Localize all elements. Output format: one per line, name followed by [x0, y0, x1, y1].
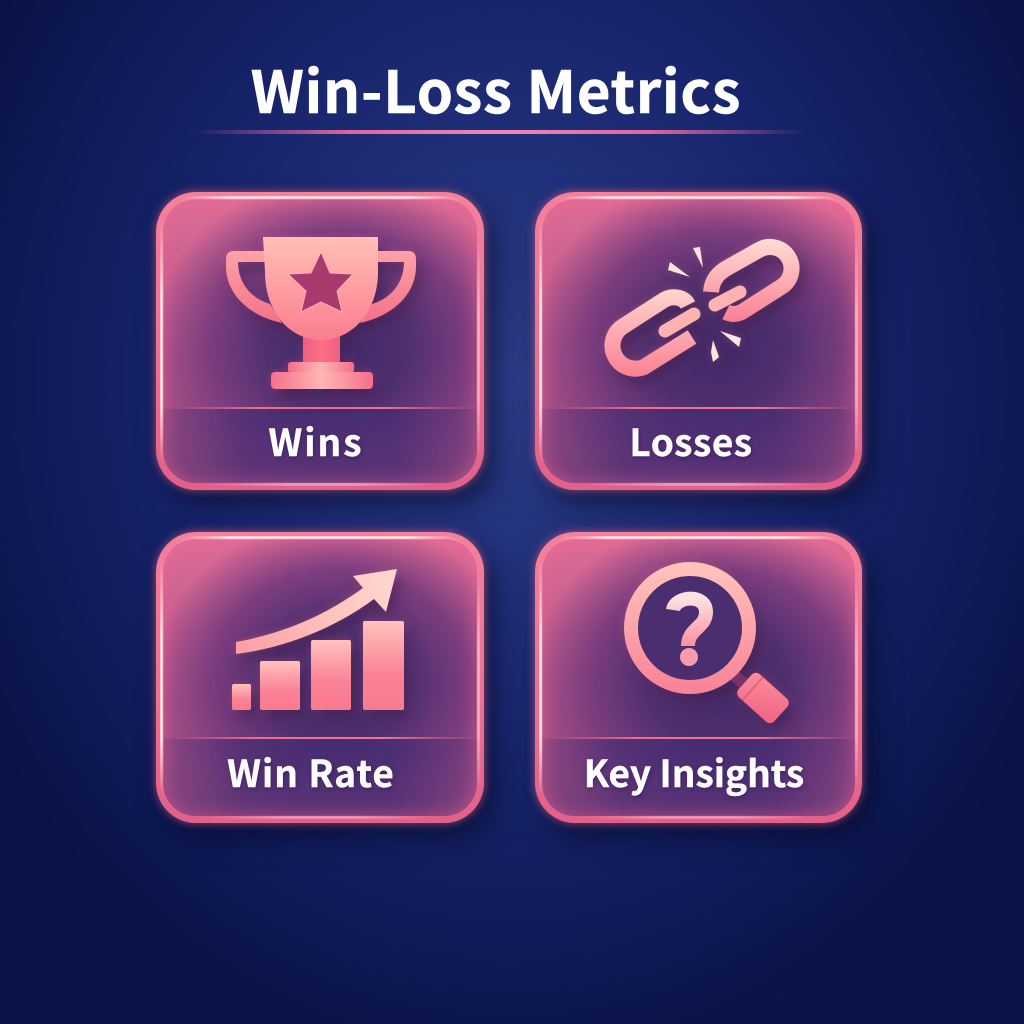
label: wins: Wins — [268, 413, 364, 467]
label: key insights: Key Insights — [584, 744, 804, 798]
title underline — [195, 130, 805, 134]
label: win rate: Win Rate — [227, 744, 395, 798]
icon: rising bar chart — [229, 568, 412, 720]
panel: losses — [535, 192, 862, 490]
title: Win-Loss Metrics — [251, 46, 741, 130]
panel: key insights — [535, 532, 862, 823]
panel: win rate — [156, 532, 484, 823]
icon: magnifier with question mark — [622, 560, 793, 738]
panel: wins — [156, 192, 484, 490]
label: losses: Losses — [629, 413, 753, 467]
icon: trophy — [226, 234, 425, 400]
icon: broken chain — [602, 236, 808, 386]
